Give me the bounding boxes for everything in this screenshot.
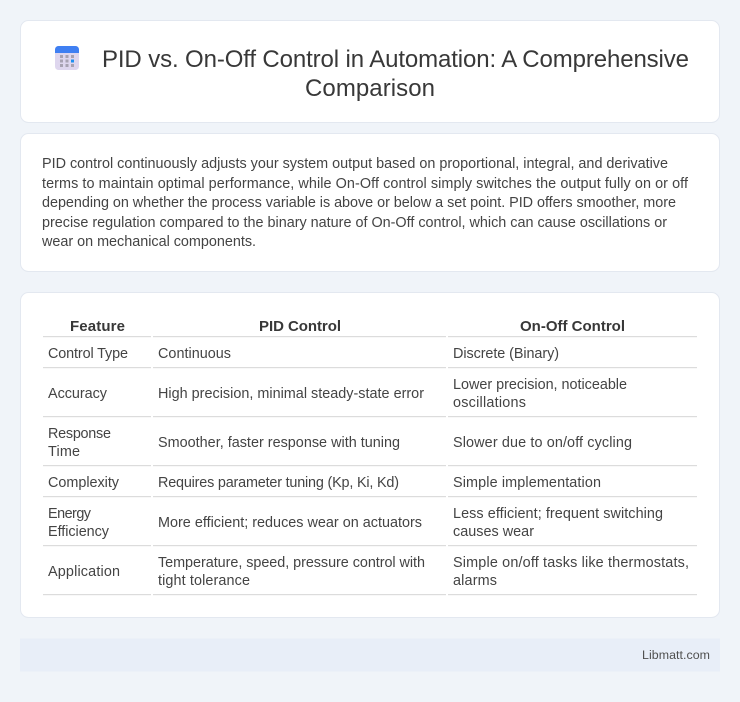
text block: introduction paragraph: depending on whether the process variable is above or below a set point. PID offers smoother, more (42, 195, 676, 211)
table row: accuracy: Lower precision, noticeable (453, 377, 627, 393)
table row: response time: Response (48, 426, 111, 442)
table row: response time (43, 426, 697, 466)
table row: accuracy: oscillations (453, 395, 526, 411)
table row: application: Simple on/off tasks like thermostats, (453, 555, 689, 571)
table row: complexity (43, 475, 697, 497)
table row: energy efficiency: causes wear (453, 524, 534, 540)
footer credit: Libmatt.com (642, 648, 710, 662)
table row: accuracy (43, 377, 697, 417)
table row: energy efficiency: Less efficient; frequent switching (453, 506, 663, 522)
table row: application: alarms (453, 573, 497, 589)
table header row: PID Control (259, 318, 341, 335)
table row: energy efficiency (43, 506, 697, 546)
table row: complexity: Requires parameter tuning (Kp, Ki, Kd) (158, 475, 399, 491)
panel: title card (20, 20, 720, 122)
table row: control type: Discrete (Binary) (453, 346, 559, 362)
table row: complexity: Complexity (48, 475, 120, 491)
table row: control type: Continuous (158, 346, 231, 362)
table row: accuracy: Accuracy (48, 386, 108, 402)
table header row (43, 318, 697, 337)
table row: application: Application (48, 564, 120, 580)
table row: response time: Slower due to on/off cycling (453, 435, 632, 451)
table row: response time: Time (48, 444, 80, 460)
table row: application (43, 555, 697, 595)
table row: application: tight tolerance (158, 573, 250, 589)
title (102, 46, 689, 102)
table row: energy efficiency: Efficiency (48, 524, 110, 540)
panel: introduction (20, 134, 720, 272)
icon: calendar (55, 46, 79, 70)
table row: application: Temperature, speed, pressure control with (158, 555, 425, 571)
table row: energy efficiency: More efficient; reduces wear on actuators (158, 515, 422, 531)
panel: comparison table (20, 292, 720, 618)
table header row: On-Off Control (520, 318, 625, 335)
table row: energy efficiency: Energy (48, 506, 92, 522)
text block: introduction paragraph: wear on mechanical components. (41, 234, 256, 250)
table row: complexity: Simple implementation (453, 475, 601, 491)
text block: introduction paragraph: terms to maintain optimal performance, while On-Off control simply switches the output fully on or off (42, 176, 689, 192)
text block: introduction paragraph: PID control continuously adjusts your system output based on proportional, integral, and derivative (42, 156, 668, 172)
text block: introduction paragraph (41, 156, 689, 250)
table header row: Feature (70, 318, 125, 335)
table row: response time: Smoother, faster response with tuning (158, 435, 400, 451)
text block: introduction paragraph: precise regulation compared to the binary nature of On-Off control, which can cause oscillations or (42, 215, 667, 231)
title: Comparison (305, 75, 435, 102)
table row: accuracy: High precision, minimal steady-state error (158, 386, 424, 402)
table row: control type (43, 346, 697, 368)
footer (20, 638, 720, 672)
title: PID vs. On-Off Control in Automation: A Comprehensive (102, 46, 689, 73)
table row: control type: Control Type (48, 346, 128, 362)
